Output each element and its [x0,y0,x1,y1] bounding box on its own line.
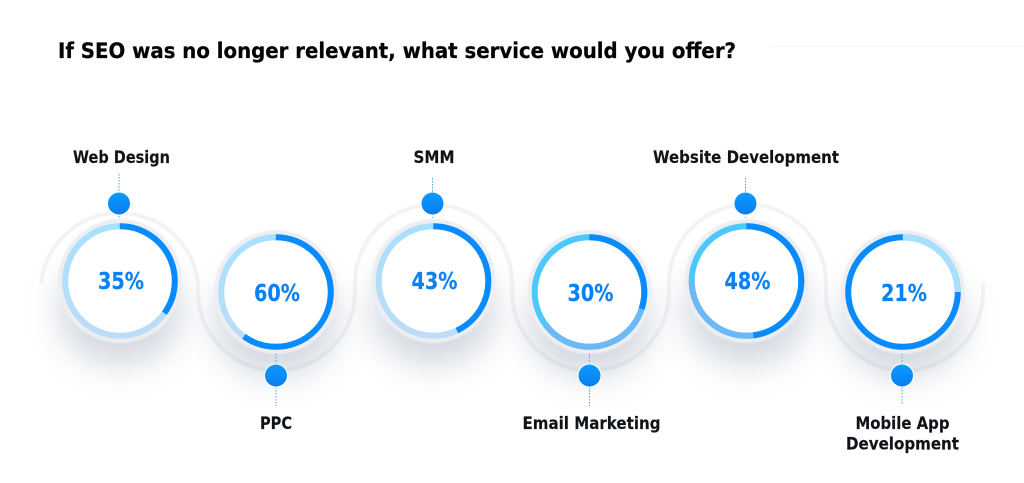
top-right faint rule [770,46,1024,47]
chart: SMM 43% [372,219,496,366]
chart: Website Development 48% [684,219,808,366]
title: If SEO was no longer relevant, what service would you offer? [58,39,736,63]
chart: SMM 43%: 43% [412,269,458,295]
label: Website Development: Website Development [653,148,839,167]
label: Web Design: Web Design [73,148,170,167]
chart: Mobile App Development 21%: 21% [881,281,927,307]
label: Mobile App Development: Mobile App [856,414,950,433]
chart: Email Marketing 30%: 30% [568,281,614,307]
label: PPC: PPC [260,414,292,433]
label: Email Marketing: Email Marketing [522,414,660,433]
chart: Email Marketing 30% [528,230,652,377]
chart: PPC 60%: 60% [254,281,300,307]
connector: SMM [420,178,444,218]
connector: Mobile App Development [890,354,914,404]
chart: Web Design 35%: 35% [98,269,144,295]
chart: Web Design 35% [58,219,182,366]
connector: Website Development [734,178,758,218]
connector: Email Marketing [578,354,602,406]
wavy track [41,204,983,370]
label: Mobile App Development: Development [846,434,959,454]
chart: Mobile App Development 21% [841,230,965,377]
label: SMM: SMM [414,148,454,167]
chart: PPC 60% [214,230,338,377]
connector: PPC [264,354,288,406]
connector: Web Design [107,174,131,218]
chart: Website Development 48%: 48% [724,269,770,295]
